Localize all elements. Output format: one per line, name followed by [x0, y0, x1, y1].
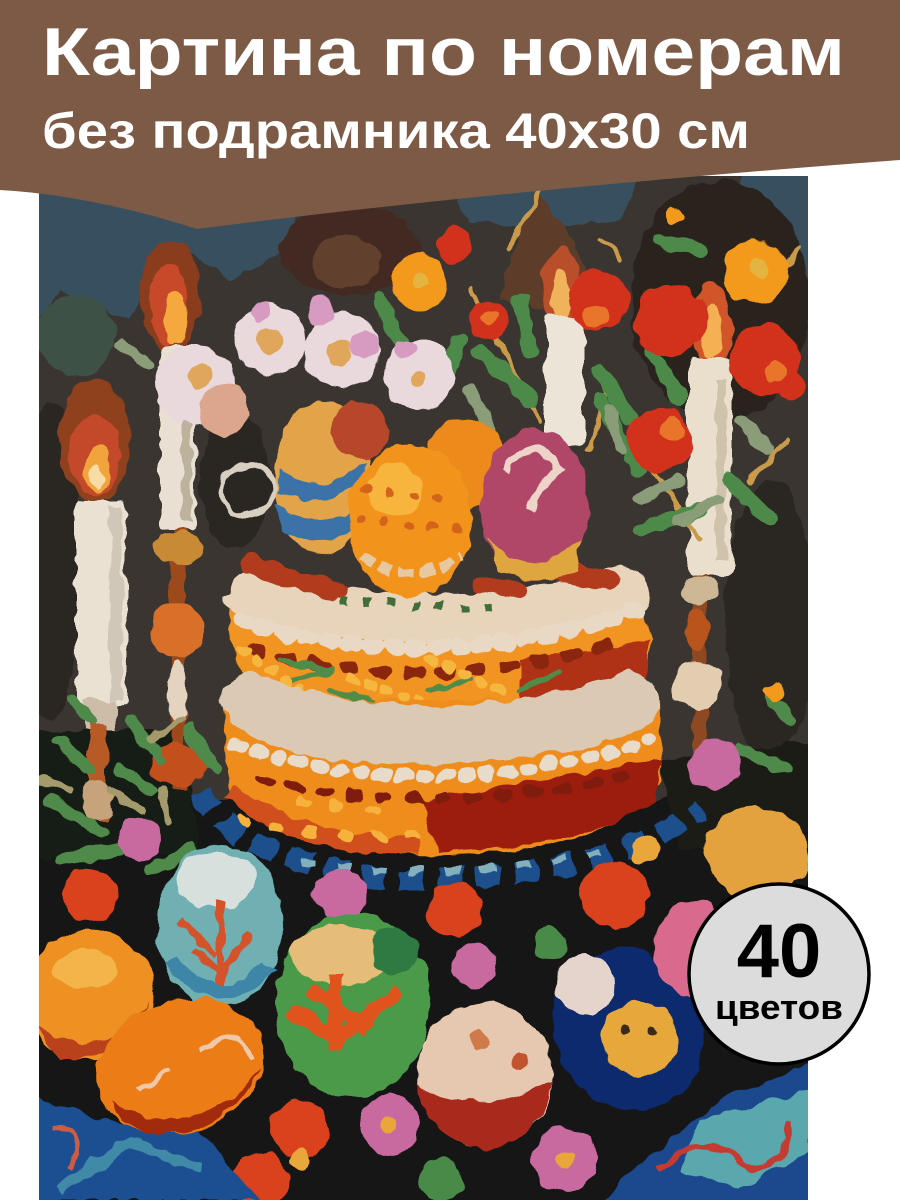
egg: orange red	[95, 996, 264, 1135]
egg: dark blue	[552, 946, 704, 1112]
cloth: blue tablecloth	[20, 1060, 820, 1200]
candle: centre back	[542, 245, 584, 445]
candle: far left	[59, 378, 131, 820]
candle: second left	[140, 239, 274, 790]
flowers: orange and red	[392, 207, 804, 702]
egg: cream and red	[417, 1003, 553, 1148]
flowers: white and pink blossoms	[155, 296, 453, 436]
egg: orange right	[705, 806, 809, 898]
table flowers	[62, 739, 741, 1200]
egg: green	[275, 913, 431, 1097]
badge: 40 colours: цветов	[715, 989, 843, 1027]
title: Картина по номерам	[42, 14, 845, 90]
egg: pink right	[653, 900, 714, 998]
painting background	[20, 160, 820, 1200]
header banner	[0, 0, 900, 229]
egg: orange left	[26, 930, 154, 1060]
eggs on the table	[26, 806, 809, 1155]
badge: 40 colours	[689, 884, 869, 1064]
subtitle: без подрамника 40х30 см	[42, 103, 750, 159]
painting: Easter cake still life	[20, 160, 820, 1200]
badge: 40 colours: 40	[737, 909, 821, 994]
foliage and stems	[40, 190, 800, 870]
plate: blue patterned rim	[200, 790, 700, 880]
cake: upper and lower tiers	[218, 565, 662, 855]
candle: right	[672, 283, 732, 770]
egg: teal	[157, 843, 283, 1007]
eggs on top of the cake	[260, 400, 589, 596]
